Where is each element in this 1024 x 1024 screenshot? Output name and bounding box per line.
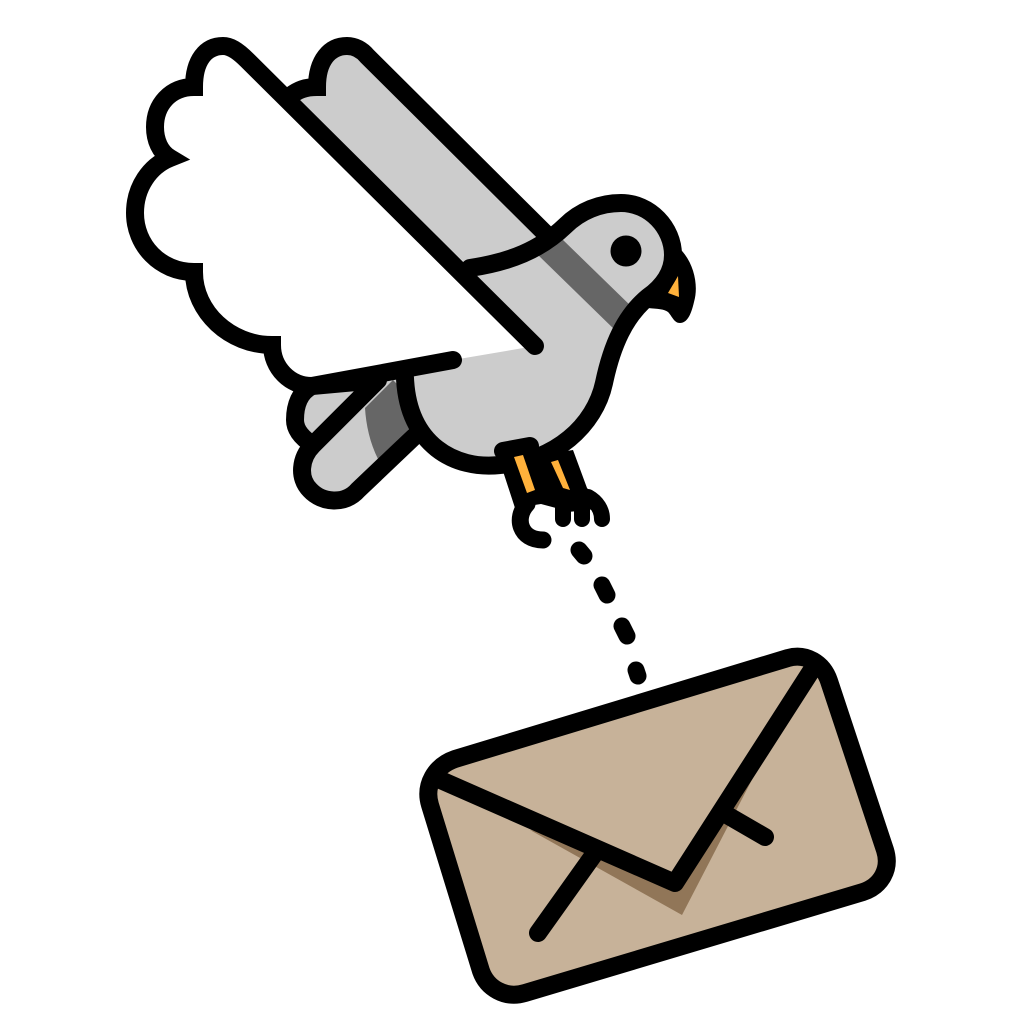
body outline [405, 203, 673, 466]
back wing [290, 46, 562, 268]
flap outline [436, 665, 815, 883]
flap shadow [530, 770, 757, 915]
tail feathers [295, 378, 420, 501]
neck band [537, 239, 636, 333]
body [405, 203, 673, 466]
dashed flight path [579, 550, 638, 676]
beak [648, 245, 696, 323]
left fold line [538, 853, 595, 933]
legs and feet [500, 446, 602, 540]
pigeon [135, 46, 696, 540]
envelope body [428, 657, 887, 995]
flap [436, 665, 815, 883]
eye [610, 236, 642, 266]
envelope [428, 657, 887, 995]
front wing [135, 46, 535, 386]
right fold line [727, 815, 765, 837]
